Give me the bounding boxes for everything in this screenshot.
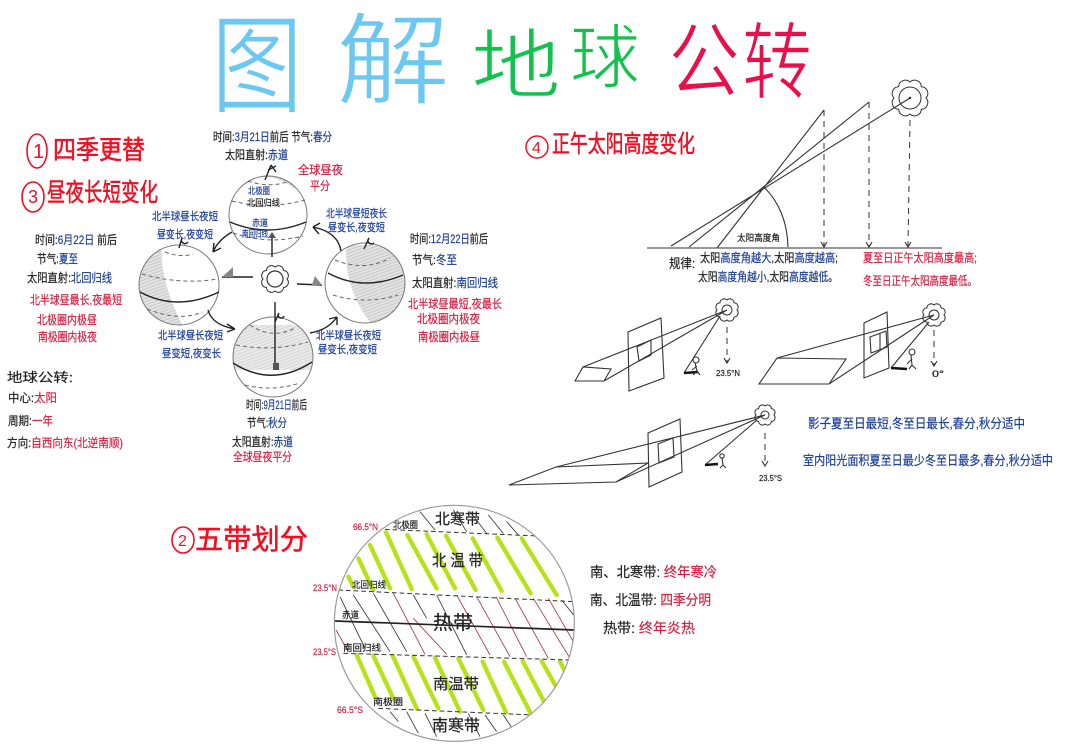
text block: June solstice: 太阳直射:北回归线 bbox=[27, 270, 112, 285]
frigid zone hatching bbox=[390, 510, 518, 737]
south temperate stripes bbox=[357, 655, 566, 713]
text block: December solstice: 北半球昼最短,夜最长 bbox=[408, 296, 502, 311]
text block: altitude rule: 规律: bbox=[669, 256, 695, 271]
chart: five climate zones: 北寒带 bbox=[435, 510, 480, 528]
labels: day and night changes: 北半球昼长夜短 bbox=[316, 328, 381, 342]
text block: solstice noon altitude bbox=[863, 250, 977, 288]
text block: March equinox bbox=[213, 129, 343, 193]
text block: September equinox: 节气:秋分 bbox=[247, 415, 287, 430]
text block: June solstice bbox=[27, 232, 122, 344]
arrows: orbit direction bbox=[208, 223, 341, 333]
chart: five climate zones: 23.5°N bbox=[313, 583, 337, 593]
chart: five climate zones: 南极圈 bbox=[373, 696, 403, 707]
chart: five climate zones: 赤道 bbox=[342, 609, 359, 620]
chart: five climate zones: 热带 bbox=[433, 612, 473, 634]
diagram: solar altitude angle bbox=[647, 80, 942, 248]
text block: December solstice bbox=[408, 231, 502, 344]
torrid zone red hatching bbox=[336, 593, 573, 658]
text block: revolution facts: 方向:自西向东(北逆南顺) bbox=[7, 435, 123, 450]
globe: September equinox bbox=[233, 313, 313, 397]
text block: zone climate: 热带: 终年炎热 bbox=[603, 620, 695, 636]
text block: December solstice: 节气:冬至 bbox=[412, 252, 457, 267]
torrid zone black hatching bbox=[340, 593, 575, 655]
heading: 1 seasons: 1 bbox=[33, 141, 44, 163]
globe: March equinox: 赤道 bbox=[252, 217, 268, 228]
text block: solstice noon altitude: 冬至日正午太阳高度最低。 bbox=[863, 273, 977, 288]
text block: September equinox bbox=[232, 397, 307, 464]
text block: shadow and sunlit area: 影子夏至日最短,冬至日最长,春分,秋分适中 bbox=[808, 416, 1025, 431]
text block: March equinox: 全球昼夜 bbox=[298, 162, 343, 177]
diagram: window sunlight in winter bbox=[509, 405, 782, 487]
globe: March equinox: 北极圈 bbox=[248, 185, 270, 196]
text block: June solstice: 北极圈内极昼 bbox=[37, 313, 97, 327]
heading: 1 seasons bbox=[27, 134, 145, 168]
diagram: window sunlight at equinox: 0° bbox=[932, 369, 945, 379]
text block: September equinox: 太阳直射:赤道 bbox=[232, 434, 293, 449]
chart: five climate zones: 北 温 带 bbox=[432, 552, 483, 570]
north temperate stripes bbox=[348, 532, 557, 595]
heading: 3 day length bbox=[22, 179, 158, 212]
text block: September equinox: 时间:9月21日前后 bbox=[246, 397, 307, 412]
globe: June solstice bbox=[135, 238, 219, 330]
labels: day and night changes: 昼变长,夜变短 bbox=[157, 227, 213, 241]
globe: March equinox: 南回归线 bbox=[242, 228, 268, 239]
heading: 3 day length: 昼夜长短变化 bbox=[47, 179, 158, 207]
text block: September equinox: 全球昼夜平分 bbox=[233, 449, 292, 464]
text block: zone climate: 南、北寒带: 终年寒冷 bbox=[590, 564, 717, 580]
title: 公 bbox=[668, 17, 740, 108]
text block: altitude rule: 太阳高度角越大,太阳高度越高; bbox=[700, 250, 838, 265]
text block: December solstice: 时间:12月22日前后 bbox=[410, 231, 488, 246]
sun: orbit centre bbox=[262, 266, 288, 292]
heading: 3 day length: 3 bbox=[28, 187, 38, 207]
text block: zone climate bbox=[590, 564, 717, 636]
text block: revolution facts: 周期:一年 bbox=[8, 414, 53, 428]
chart: five climate zones: 北极圈 bbox=[393, 519, 418, 530]
text block: altitude rule bbox=[669, 250, 838, 284]
labels: day and night changes: 昼变长,夜变短 bbox=[318, 342, 377, 356]
text block: revolution facts: 地球公转: bbox=[7, 370, 73, 385]
diagram: window sunlight in summer: 23.5°N bbox=[716, 369, 740, 378]
diagram: window sunlight in winter: 23.5°S bbox=[759, 474, 782, 483]
title: 球 bbox=[570, 19, 640, 97]
globe: March equinox bbox=[229, 165, 307, 254]
heading: 4 noon solar altitude bbox=[526, 131, 695, 158]
text block: altitude rule: 太阳高度角越小,太阳高度越低。 bbox=[698, 269, 838, 284]
text block: revolution facts bbox=[7, 370, 123, 450]
heading: 4 noon solar altitude: 4 bbox=[532, 140, 541, 157]
chart: five climate zones: 南回归线 bbox=[343, 642, 381, 653]
title bbox=[211, 6, 812, 127]
diagram: solar altitude angle: 太阳高度角 bbox=[737, 232, 780, 243]
chart: five climate zones: 南寒带 bbox=[432, 716, 480, 735]
text block: shadow and sunlit area bbox=[803, 416, 1053, 468]
text block: June solstice: 南极圈内极夜 bbox=[38, 329, 97, 344]
text block: December solstice: 南极圈内极昼 bbox=[418, 329, 480, 344]
text block: March equinox: 时间:3月21日前后 节气:春分 bbox=[213, 129, 332, 144]
labels: day and night changes bbox=[152, 206, 387, 360]
title: 图 bbox=[211, 6, 303, 127]
heading: 2 five zones: 2 bbox=[178, 533, 187, 550]
heading: 1 seasons: 四季更替 bbox=[53, 135, 145, 165]
labels: day and night changes: 昼变长,夜变短 bbox=[328, 220, 385, 234]
diagram: window sunlight at equinox bbox=[759, 304, 945, 384]
title: 转 bbox=[742, 16, 812, 110]
text block: June solstice: 时间:6月22日 前后 bbox=[35, 232, 117, 247]
text block: March equinox: 平分 bbox=[310, 179, 330, 193]
text block: zone climate: 南、北温带: 四季分明 bbox=[590, 592, 711, 608]
chart: five climate zones: 南温带 bbox=[433, 676, 479, 693]
title: 解 bbox=[336, 6, 450, 118]
text block: June solstice: 北半球昼最长,夜最短 bbox=[30, 292, 122, 307]
chart: five climate zones: 66.5°N bbox=[353, 522, 378, 532]
text block: December solstice: 北极圈内极夜 bbox=[417, 311, 480, 326]
arrows: sun rays bbox=[222, 232, 322, 370]
labels: day and night changes: 北半球昼长夜短 bbox=[152, 209, 218, 223]
text block: solstice noon altitude: 夏至日正午太阳高度最高; bbox=[863, 250, 977, 265]
text block: March equinox: 太阳直射:赤道 bbox=[225, 147, 288, 162]
title: 地 bbox=[471, 24, 561, 109]
chart: five climate zones bbox=[313, 505, 575, 741]
text block: December solstice: 太阳直射:南回归线 bbox=[412, 275, 498, 290]
labels: day and night changes: 北半球昼短夜长 bbox=[326, 206, 387, 220]
diagram: window sunlight in summer bbox=[575, 299, 740, 391]
heading: 4 noon solar altitude: 正午太阳高度变化 bbox=[552, 131, 695, 158]
text block: June solstice: 节气:夏至 bbox=[37, 251, 78, 266]
labels: day and night changes: 昼变短,夜变长 bbox=[162, 346, 221, 360]
chart: five climate zones: 23.5°S bbox=[313, 647, 336, 657]
chart: five climate zones: 66.5°S bbox=[337, 705, 363, 715]
globe: December solstice bbox=[325, 238, 410, 325]
globe: March equinox: 北回归线 bbox=[247, 197, 280, 208]
labels: day and night changes: 北半球昼长夜短 bbox=[158, 328, 223, 342]
chart: five climate zones: 北回归线 bbox=[352, 579, 386, 590]
heading: 2 five zones: 五带划分 bbox=[195, 524, 308, 555]
text block: revolution facts: 中心:太阳 bbox=[8, 390, 57, 405]
